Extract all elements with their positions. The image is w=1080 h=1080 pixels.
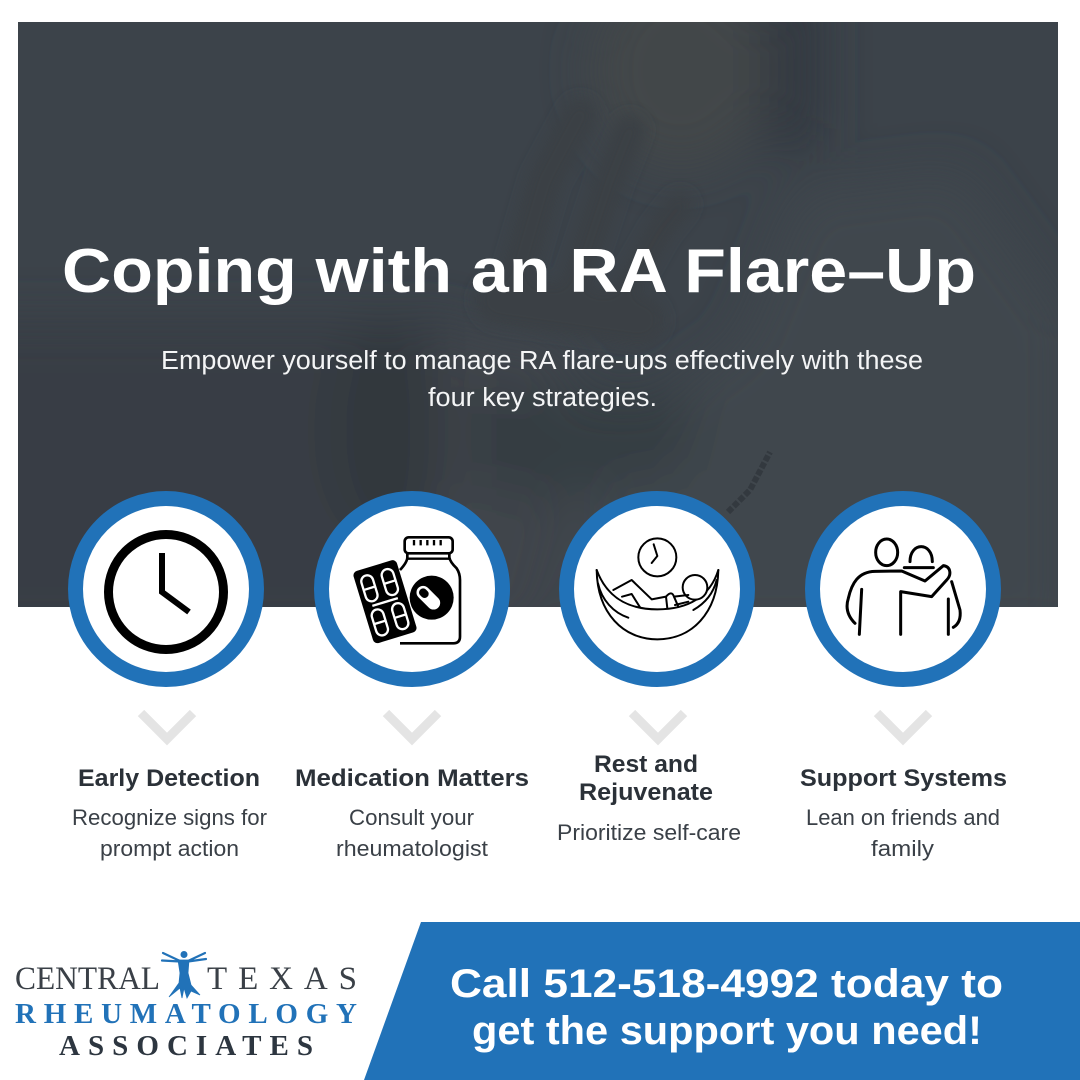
strategy: medication matters (295, 765, 529, 861)
strategy: early detection: Early Detection (78, 765, 260, 792)
subtitle: Empower yourself to manage RA flare-ups effectively with these (161, 347, 923, 375)
icon: rest hammock in blue ring (566, 498, 748, 680)
strategy: support systems: Lean on friends and (806, 805, 1000, 830)
strategy: rest and rejuvenate: Rejuvenate (579, 779, 713, 806)
strategy: support systems: family (871, 836, 935, 861)
logo: Central Texas Rheumatology Associates: RHEUMATOLOGY (15, 998, 357, 1030)
subtitle: four key strategies. (428, 384, 657, 412)
hero panel: darkened photo background (18, 22, 1058, 607)
icon: medication in blue ring (322, 498, 502, 680)
strategy: rest and rejuvenate (557, 751, 741, 845)
strategy: medication matters: Consult your (349, 805, 474, 830)
strategy: medication matters: Medication Matters (295, 765, 529, 792)
strategy: early detection: Recognize signs for (72, 805, 267, 830)
strategy: rest and rejuvenate: Prioritize self-care (557, 820, 741, 845)
strategy: early detection (72, 765, 267, 861)
icon: vitruvian figure (162, 951, 206, 998)
strategy: support systems (800, 765, 1007, 861)
title: Coping with an RA Flare–Up (62, 237, 976, 306)
logo: Central Texas Rheumatology Associates: CENTRAL (15, 961, 160, 997)
icon: support people in blue ring (812, 498, 994, 680)
subtitle (161, 347, 923, 412)
icon: clock in blue ring (76, 498, 256, 680)
strategy: rest and rejuvenate: Rest and (594, 751, 698, 778)
call to action banner (364, 922, 1080, 1080)
logo: Central Texas Rheumatology Associates: ASSOCIATES (59, 1030, 313, 1062)
logo: Central Texas Rheumatology Associates: TEXAS (207, 961, 357, 997)
logo: Central Texas Rheumatology Associates (15, 951, 357, 1062)
strategy: support systems: Support Systems (800, 765, 1007, 792)
strategy: early detection: prompt action (100, 836, 239, 861)
call to action banner: get the support you need! (472, 1009, 982, 1053)
chevron arrows (141, 713, 929, 739)
call to action banner: Call 512-518-4992 today to (450, 962, 1003, 1006)
strategy: medication matters: rheumatologist (336, 836, 489, 861)
